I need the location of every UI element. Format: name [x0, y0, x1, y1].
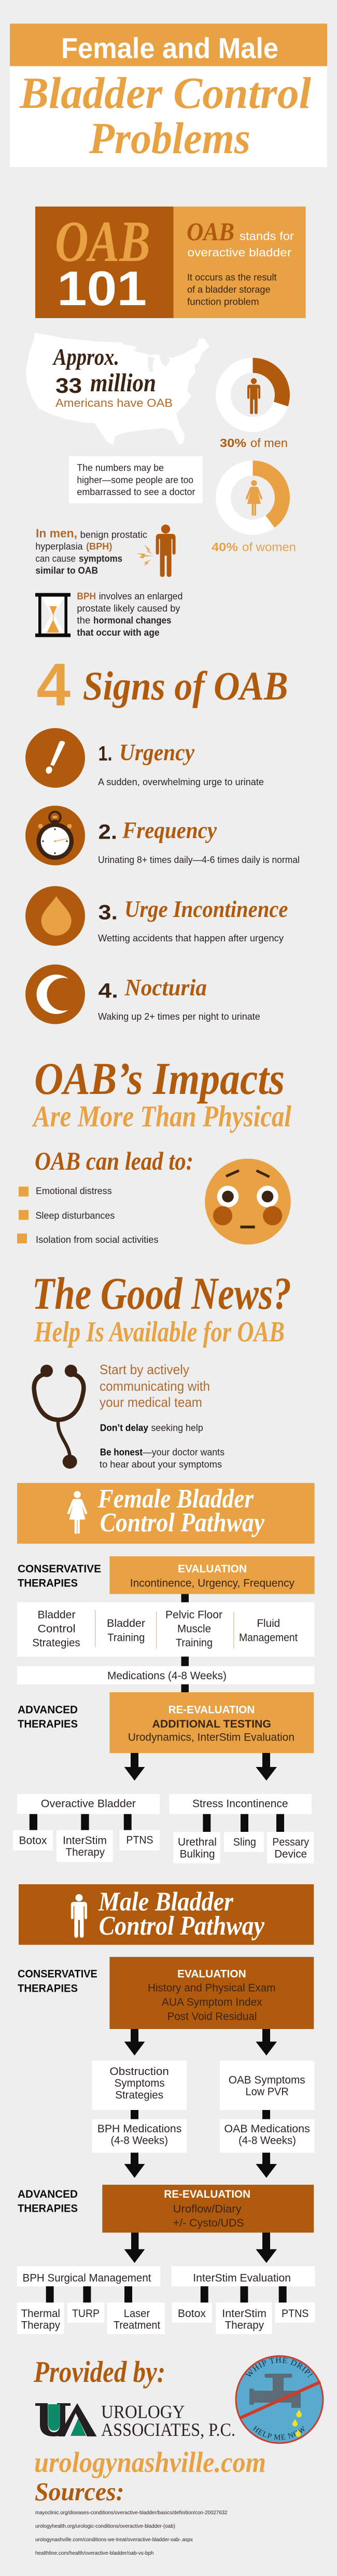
- logo: Urology Associates: ASSOCIATES, P.C.: [101, 2419, 235, 2440]
- sign 1: urgency: [25, 728, 264, 788]
- sources: [35, 2477, 228, 2556]
- box: OAB symptoms: OAB Symptoms: [229, 2074, 305, 2086]
- panel: OAB 101: It occurs as the result: [187, 272, 277, 283]
- branch: BPH surgical management: Laser: [124, 2308, 150, 2320]
- sign 3: urge incontinence: Urge Incontinence: [124, 896, 288, 922]
- text block: in men BPH: can cause: [35, 554, 76, 564]
- icon: exclamation mark: [25, 728, 85, 788]
- text block: in men BPH: benign prostatic: [80, 530, 147, 540]
- label: advanced therapies (male): [18, 2188, 78, 2214]
- box: female re-evaluation: [109, 1692, 314, 1753]
- box: female evaluation: EVALUATION: [178, 1563, 247, 1575]
- box: medications: [17, 1666, 315, 1684]
- banner: male bladder control pathway: [19, 1884, 314, 1945]
- box: BPH medications: BPH Medications: [97, 2123, 181, 2135]
- branch: overactive bladder: Overactive Bladder: [41, 1798, 136, 1810]
- sign 3: urge incontinence: 3.: [99, 901, 118, 924]
- heading: provided by: Provided by:: [33, 2355, 165, 2389]
- label: advanced therapies (male): ADVANCED: [18, 2188, 78, 2200]
- box: female re-evaluation: Urodynamics, InterStim Evaluation: [128, 1731, 294, 1743]
- heading: 4 Signs of OAB: [36, 651, 288, 718]
- box: female evaluation: Incontinence, Urgency, Frequency: [130, 1577, 294, 1589]
- sign 4: nocturia: 4.: [99, 980, 118, 1003]
- label: conservative therapies (male): CONSERVATIVE: [18, 1968, 97, 1980]
- box: female re-evaluation: RE-EVALUATION: [168, 1704, 255, 1716]
- sources: Sources:: [35, 2477, 124, 2506]
- branch: BPH surgical management: Thermal: [21, 2308, 60, 2320]
- donut chart: 30% of men: of men: [250, 436, 288, 450]
- arrow: to InterStim evaluation: [256, 2232, 277, 2263]
- box: male re-evaluation: +/- Cysto/UDS: [173, 2217, 244, 2229]
- donut chart: 40% of women: [212, 468, 296, 554]
- branch: InterStim evaluation: Therapy: [225, 2319, 264, 2331]
- callout: numbers may be higher: [69, 456, 202, 503]
- sources: healthline.com/health/overactive-bladder/oab-vs-bph: [35, 2550, 154, 2556]
- text block: BPH explanation: hormonal changes: [93, 615, 171, 626]
- text block: BPH explanation: the: [77, 615, 90, 626]
- sign 2: frequency: Urinating 8+ times daily—4-6 times daily is normal: [98, 855, 300, 865]
- text block: start by communicating: —your doctor wants: [143, 1447, 224, 1457]
- sign 1: urgency: 1.: [99, 743, 112, 765]
- map: United States with 33 million statistic: Americans have OAB: [55, 396, 173, 409]
- heading: OAB's Impacts: OAB’s Impacts: [34, 1054, 285, 1104]
- box: OAB symptoms: Low PVR: [246, 2086, 289, 2098]
- arrow: to overactive bladder: [124, 1753, 145, 1780]
- icon: hourglass: [35, 593, 71, 637]
- title: [10, 24, 327, 167]
- text block: start by communicating: [100, 1362, 224, 1470]
- branch: overactive bladder: PTNS: [126, 1834, 153, 1846]
- branch: InterStim evaluation: PTNS: [282, 2308, 308, 2320]
- branch: InterStim evaluation: [172, 2266, 315, 2334]
- connector: [131, 2110, 138, 2119]
- branch: BPH surgical management: Therapy: [21, 2319, 60, 2331]
- label: conservative therapies (male): [18, 1968, 97, 1994]
- label: conservative therapies (female): [18, 1563, 101, 1589]
- box: medications: Medications (4-8 Weeks): [107, 1670, 227, 1682]
- label: conservative therapies (female): THERAPIES: [18, 1577, 78, 1589]
- box: male re-evaluation: [102, 2185, 314, 2232]
- branch: stress incontinence: Urethral: [178, 1837, 217, 1848]
- branch: stress incontinence: Stress Incontinence: [192, 1798, 288, 1810]
- branch: BPH surgical management: BPH Surgical Management: [23, 2272, 151, 2284]
- map: United States with 33 million statistic: Approx.: [52, 344, 119, 370]
- title: Problems: [89, 113, 250, 163]
- text block: start by communicating: seeking help: [151, 1423, 203, 1433]
- box: male re-evaluation: Uroflow/Diary: [173, 2203, 242, 2215]
- branch: stress incontinence: Device: [274, 1848, 307, 1860]
- text block: start by communicating: your medical team: [100, 1394, 202, 1410]
- arrow: to OAB symptoms: [256, 2029, 277, 2056]
- panel: OAB 101: OAB: [55, 210, 150, 274]
- title: Bladder Control: [19, 68, 311, 118]
- box: obstruction symptoms: Obstruction: [109, 2065, 169, 2077]
- text block: in men BPH: [35, 527, 147, 576]
- website: urologynashville.com: [34, 2446, 266, 2478]
- box: OAB medications: (4-8 Weeks): [238, 2135, 296, 2147]
- map: United States with 33 million statistic: million: [90, 368, 156, 397]
- box: male evaluation: AUA Symptom Index: [162, 1996, 262, 2008]
- donut chart: 40% of women: 40%: [212, 540, 238, 554]
- branch: InterStim evaluation: Botox: [178, 2308, 206, 2320]
- donut chart: 30% of men: [220, 365, 288, 450]
- branch: BPH surgical management: TURP: [72, 2308, 100, 2320]
- box: obstruction symptoms: Strategies: [115, 2089, 163, 2101]
- text block: BPH explanation: involves an enlarged: [99, 591, 182, 601]
- branch: overactive bladder: [13, 1794, 160, 1862]
- arrow: to male re-evaluation right: [256, 2153, 277, 2178]
- list: OAB can lead to: Isolation from social activities: [36, 1235, 159, 1245]
- box: female re-evaluation: ADDITIONAL TESTING: [152, 1718, 271, 1730]
- text block: in men BPH: In men,: [36, 527, 77, 540]
- arrow: to stress incontinence: [256, 1753, 277, 1780]
- text block: BPH explanation: [77, 591, 182, 638]
- arrow: to BPH surgical management: [124, 2232, 145, 2263]
- box: conservative options: [17, 1602, 315, 1656]
- icon: embarrassed face: [205, 1159, 291, 1244]
- arrow: to male re-evaluation left: [124, 2153, 145, 2178]
- branch: stress incontinence: [169, 1794, 314, 1864]
- sign 4: nocturia: Nocturia: [124, 974, 207, 1001]
- text block: BPH explanation: that occur with age: [77, 627, 160, 638]
- label: advanced therapies (female): THERAPIES: [18, 1718, 78, 1730]
- list: OAB can lead to: Sleep disturbances: [35, 1210, 115, 1221]
- text block: BPH explanation: BPH: [77, 591, 96, 601]
- banner: female bladder control pathway: Female Bladder: [97, 1484, 254, 1514]
- donut chart: 30% of men: 30%: [220, 436, 246, 450]
- box: conservative options: Management: [239, 1632, 298, 1644]
- list: OAB can lead to: [17, 1146, 193, 1245]
- text block: start by communicating: to hear about your symptoms: [100, 1459, 222, 1470]
- logo: Urology Associates: UROLOGY: [101, 2401, 185, 2422]
- branch: overactive bladder: Botox: [19, 1834, 47, 1846]
- box: OAB medications: [220, 2119, 315, 2153]
- box: female evaluation: [109, 1556, 315, 1594]
- branch: InterStim evaluation: InterStim Evaluation: [193, 2272, 291, 2284]
- box: male evaluation: History and Physical Exam: [148, 1982, 276, 1994]
- banner: male bladder control pathway: Control Pathway: [99, 1911, 265, 1941]
- heading: OAB's Impacts: [32, 1054, 292, 1133]
- branch: InterStim evaluation: InterStim: [222, 2308, 266, 2320]
- box: male evaluation: Post Void Residual: [167, 2010, 257, 2022]
- panel: OAB 101: function problem: [187, 297, 259, 307]
- banner: female bladder control pathway: Control Pathway: [100, 1508, 265, 1538]
- text block: in men BPH: (BPH): [86, 541, 112, 552]
- box: male evaluation: [109, 1957, 314, 2029]
- icon: stopwatch: [25, 805, 85, 866]
- text block: BPH explanation: prostate likely caused by: [77, 603, 180, 613]
- map: United States with 33 million statistic: [26, 333, 209, 445]
- icon: water drop: [25, 886, 85, 946]
- list: OAB can lead to: OAB can lead to:: [35, 1146, 193, 1175]
- label: advanced therapies (male): THERAPIES: [18, 2202, 78, 2214]
- panel: OAB 101: stands for: [240, 230, 294, 243]
- sign 4: nocturia: Waking up 2+ times per night to urinate: [98, 1011, 260, 1022]
- icon: crescent moon: [25, 964, 85, 1024]
- sources: urologyhealth.org/urologic-conditions/overactive-bladder-(oab): [35, 2523, 175, 2529]
- text block: start by communicating: communicating with: [100, 1378, 210, 1394]
- label: conservative therapies (male): THERAPIES: [18, 1982, 78, 1994]
- logo: Urology Associates: [35, 2401, 235, 2440]
- label: conservative therapies (female): CONSERVATIVE: [18, 1563, 101, 1575]
- sources: mayoclinic.org/diseases-conditions/overactive-bladder/basics/definition/con-20027632: [35, 2510, 228, 2516]
- box: obstruction symptoms: Symptoms: [115, 2077, 165, 2089]
- panel: OAB 101: 101: [57, 261, 147, 316]
- box: conservative options: Training: [107, 1632, 145, 1644]
- box: OAB medications: OAB Medications: [224, 2123, 310, 2135]
- box: OAB symptoms: [220, 2061, 315, 2110]
- badge: whip the drip: WHIP THE DRIP!: [245, 2357, 313, 2377]
- sign 2: frequency: Frequency: [122, 817, 217, 843]
- banner: female bladder control pathway: [17, 1483, 315, 1544]
- text block: start by communicating: Start by actively: [100, 1362, 189, 1377]
- heading: The Good News: [32, 1269, 291, 1348]
- panel: OAB 101: [35, 207, 306, 318]
- label: advanced therapies (female): ADVANCED: [18, 1704, 78, 1716]
- box: conservative options: Control: [37, 1623, 76, 1635]
- map: United States with 33 million statistic: 33: [55, 374, 82, 398]
- branch: stress incontinence: Sling: [233, 1837, 256, 1848]
- sources: urologynashville.com/conditions-we-treat/overactive-bladder-oab-.aspx: [35, 2537, 193, 2543]
- callout: numbers may be higher: higher—some people are too: [77, 475, 193, 485]
- panel: OAB 101: OAB: [187, 217, 234, 246]
- text block: in men BPH: hyperplasia: [35, 541, 83, 552]
- badge: whip the drip: [235, 2355, 324, 2444]
- callout: numbers may be higher: embarrassed to see a doctor: [77, 487, 195, 497]
- box: conservative options: Training: [176, 1637, 213, 1649]
- donut chart: 40% of women: of women: [242, 540, 296, 554]
- box: conservative options: Bladder: [107, 1618, 145, 1629]
- heading: 4 Signs of OAB: 4: [36, 651, 71, 718]
- text block: in men BPH: symptoms: [79, 554, 122, 564]
- text block: start by communicating: Don’t delay: [100, 1423, 148, 1433]
- sign 1: urgency: A sudden, overwhelming urge to urinate: [98, 777, 264, 787]
- heading: 4 Signs of OAB: Signs of OAB: [83, 663, 288, 708]
- box: male re-evaluation: RE-EVALUATION: [164, 2188, 250, 2200]
- arrow: to obstruction symptoms: [124, 2029, 145, 2056]
- text block: start by communicating: Be honest: [100, 1447, 143, 1457]
- box: conservative options: Strategies: [32, 1637, 80, 1649]
- connector: [262, 2110, 270, 2119]
- branch: stress incontinence: Pessary: [272, 1837, 309, 1848]
- panel: OAB 101: of a bladder storage: [187, 284, 271, 295]
- sign 4: nocturia: [25, 964, 260, 1024]
- box: obstruction symptoms: [92, 2061, 187, 2110]
- label: advanced therapies (female): [18, 1704, 78, 1730]
- sign 1: urgency: Urgency: [119, 739, 195, 765]
- heading: OAB's Impacts: Are More Than Physical: [32, 1100, 292, 1133]
- banner: male bladder control pathway: Male Bladder: [98, 1887, 234, 1917]
- list: OAB can lead to: Emotional distress: [36, 1186, 112, 1196]
- box: conservative options: Muscle: [177, 1623, 211, 1635]
- icon: man with lightning pain: [136, 525, 176, 577]
- connector: [181, 1684, 189, 1692]
- sign 3: urge incontinence: [25, 886, 288, 946]
- box: conservative options: Bladder: [37, 1609, 76, 1621]
- sign 2: frequency: [25, 805, 300, 866]
- icon: stethoscope: [34, 1365, 83, 1469]
- connector: [181, 1594, 189, 1602]
- sign 2: frequency: 2.: [99, 821, 117, 844]
- callout: numbers may be higher: The numbers may be: [77, 463, 164, 473]
- branch: BPH surgical management: Treatment: [114, 2319, 160, 2331]
- box: BPH medications: [92, 2119, 187, 2153]
- branch: overactive bladder: InterStim: [63, 1834, 107, 1846]
- box: male evaluation: EVALUATION: [177, 1968, 246, 1980]
- box: conservative options: Pelvic Floor: [165, 1609, 222, 1621]
- panel: OAB 101: overactive bladder: [188, 246, 291, 259]
- box: BPH medications: (4-8 Weeks): [111, 2135, 168, 2147]
- badge: whip the drip: HELP ME NOW: [252, 2426, 305, 2440]
- text block: in men BPH: similar to OAB: [35, 566, 98, 576]
- branch: BPH surgical management: [17, 2266, 165, 2334]
- sign 3: urge incontinence: Wetting accidents that happen after urgency: [98, 933, 284, 943]
- branch: overactive bladder: Therapy: [65, 1846, 105, 1858]
- connector: [181, 1656, 189, 1666]
- branch: stress incontinence: Bulking: [180, 1848, 215, 1860]
- box: conservative options: Fluid: [257, 1618, 280, 1629]
- title: Female and Male: [61, 32, 278, 64]
